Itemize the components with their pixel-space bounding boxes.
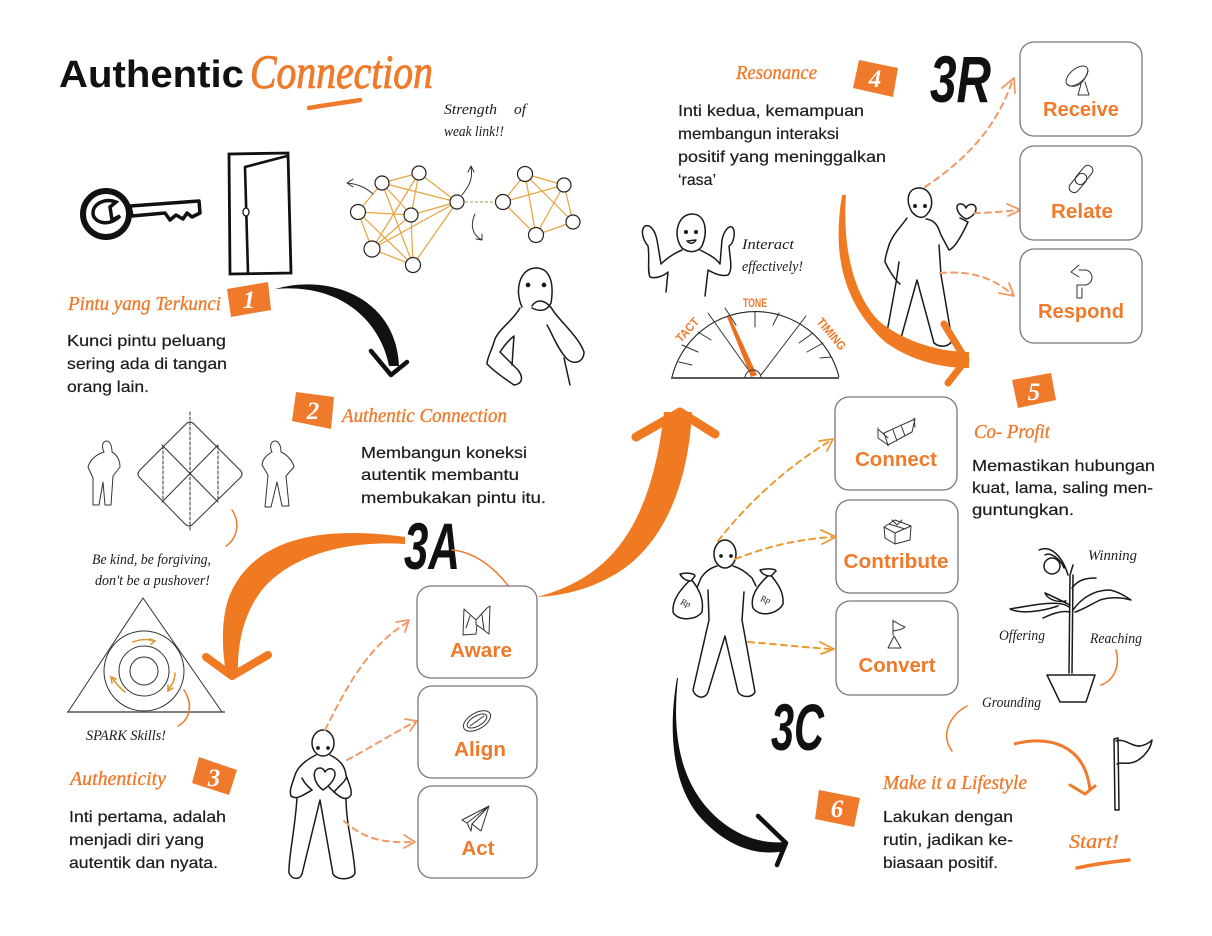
card: convert: Convert <box>858 655 936 677</box>
card: respond: Respond <box>1038 301 1124 323</box>
note: interact effectively: effectively! <box>742 259 803 275</box>
plant illustration <box>1010 549 1131 702</box>
panel: step 2: Authentic Connection <box>340 405 507 427</box>
dashed arrows: person to 3C <box>718 439 836 654</box>
card: aware: Aware <box>450 640 512 662</box>
figure: person with money bags: Rp <box>678 596 693 609</box>
card: contribute <box>836 500 958 593</box>
badge 1 <box>227 282 271 317</box>
panel: step 3 <box>68 757 237 872</box>
panel: step 6 <box>815 772 1027 872</box>
arrow: black step 1 to 2 <box>275 284 407 375</box>
note: strength of weak link: of <box>514 102 528 118</box>
gauge: tact tone timing: TONE <box>743 296 767 310</box>
card: contribute: Contribute <box>844 551 948 573</box>
card: connect: Connect <box>855 449 937 471</box>
panel: step 1: orang lain. <box>67 379 149 396</box>
figure: person offering heart <box>885 188 976 346</box>
arrow: small orange to start <box>1014 741 1095 794</box>
panel: step 3: Inti pertama, adalah <box>69 809 226 826</box>
panel: step 4: ‘rasa’ <box>678 172 716 189</box>
icon: return sign <box>1071 265 1092 298</box>
card: respond <box>1020 249 1142 343</box>
badge 1: 1 <box>243 287 255 314</box>
icon: flag on hill <box>888 620 905 648</box>
badge 5 <box>1012 373 1056 408</box>
note: interact effectively <box>741 237 803 275</box>
icon: bed <box>878 418 915 446</box>
note: interact effectively: Interact <box>741 237 795 253</box>
card: receive: Receive <box>1043 99 1119 121</box>
figure: person with money bags <box>673 540 783 697</box>
note: be kind <box>92 552 211 589</box>
arrow: black 3C to lifestyle <box>673 678 786 865</box>
badge 6: 6 <box>831 796 844 823</box>
icon: start flag <box>1114 738 1152 810</box>
badge 3: 3 <box>207 765 220 792</box>
icon: door <box>229 153 291 274</box>
title <box>59 46 433 108</box>
panel: step 1: Pintu yang Terkunci <box>67 293 221 315</box>
arrow: orange 3A to authenticity <box>206 533 405 676</box>
plant labels: Grounding <box>982 695 1041 711</box>
plant labels: Offering <box>999 628 1045 644</box>
badge 5: 5 <box>1028 379 1040 406</box>
network diagram <box>347 166 580 272</box>
panel: step 2: Membangun koneksi <box>361 445 527 462</box>
icon: gift <box>884 520 911 544</box>
arrow: orange to co-profit <box>839 195 969 383</box>
card: act <box>418 786 537 878</box>
icon: satellite dish <box>1063 62 1091 95</box>
panel: step 6: rutin, jadikan ke- <box>883 832 1013 849</box>
panel: step 5: Memastikan hubungan <box>972 458 1155 475</box>
diagram: diamond with two people <box>88 412 294 546</box>
card: relate <box>1020 146 1142 240</box>
card: align <box>418 686 537 778</box>
panel: step 5 <box>972 373 1155 519</box>
badge 6 <box>815 790 860 827</box>
icon: map <box>463 606 490 635</box>
panel: step 4: positif yang meninggalkan <box>678 149 886 166</box>
panel: step 6: biasaan positif. <box>883 855 998 872</box>
badge 3 <box>192 757 237 795</box>
gauge: tact tone timing <box>671 296 849 378</box>
big label: 3C: 3C <box>771 690 825 764</box>
panel: step 1: sering ada di tangan <box>67 356 227 373</box>
card: align: Align <box>454 739 506 761</box>
plant labels <box>947 548 1142 751</box>
badge 4 <box>853 60 898 97</box>
panel: step 4: membangun interaksi <box>678 126 839 143</box>
connector: 3A to aware <box>452 550 510 588</box>
dashed arrows: person to 3R <box>925 78 1021 296</box>
big label: 3A: 3A <box>404 509 460 583</box>
panel: step 5: kuat, lama, saling men- <box>972 480 1153 497</box>
gauge: tact tone timing: TACT <box>673 314 702 345</box>
panel: step 4 <box>678 60 898 189</box>
icon: key <box>83 191 200 237</box>
card: relate: Relate <box>1051 201 1113 223</box>
card: aware <box>417 586 537 678</box>
panel: step 3: Authenticity <box>68 768 166 790</box>
card: receive <box>1020 42 1142 136</box>
panel: step 1: Kunci pintu peluang <box>67 333 226 350</box>
title: Authentic <box>59 54 244 96</box>
big label: 3R: 3R <box>930 42 991 116</box>
panel: step 4: Resonance <box>735 62 817 84</box>
panel: step 6: Lakukan dengan <box>883 809 1013 826</box>
figure: thinking person <box>487 268 584 385</box>
panel: step 3: menjadi diri yang <box>69 832 204 849</box>
arrow: orange aware to resonance <box>537 412 715 597</box>
panel: step 4: Inti kedua, kemampuan <box>678 103 864 120</box>
panel: step 5: guntungkan. <box>972 502 1074 519</box>
panel: step 5: Co- Profit <box>974 421 1050 443</box>
dashed arrows: person to 3A <box>325 620 417 848</box>
badge 2 <box>292 392 334 429</box>
icon: paper plane <box>462 806 489 831</box>
card: convert <box>836 601 958 695</box>
start label <box>1069 831 1129 868</box>
card: act: Act <box>462 838 495 860</box>
figure: person hands up <box>642 214 734 296</box>
note: strength of weak link <box>444 102 528 140</box>
gauge: tact tone timing: TIMING <box>814 315 849 353</box>
note: spark skills: SPARK Skills! <box>86 728 166 744</box>
plant labels: Reaching <box>1089 631 1142 647</box>
icon: chain link <box>1067 163 1095 195</box>
panel: step 3: autentik dan nyata. <box>69 855 218 872</box>
panel: step 2: autentik membantu <box>361 467 519 484</box>
figure: person with money bags: Rp <box>759 593 772 606</box>
start label: Start! <box>1069 831 1119 853</box>
note: strength of weak link: Strength <box>444 102 497 118</box>
icon: compass <box>460 707 494 735</box>
note: be kind: Be kind, be forgiving, <box>92 552 211 568</box>
diagram: spark triangle <box>67 598 225 726</box>
badge 2: 2 <box>306 398 319 425</box>
card: connect <box>835 397 957 490</box>
figure: person with heart <box>289 730 355 879</box>
note: strength of weak link: weak link!! <box>444 124 504 140</box>
plant labels: Winning <box>1088 548 1137 564</box>
title: Connection <box>250 46 433 99</box>
panel: step 1 <box>67 282 271 396</box>
panel: step 2: membukakan pintu itu. <box>361 490 546 507</box>
note: be kind: don't be a pushover! <box>95 573 210 589</box>
panel: step 2 <box>292 392 546 507</box>
badge 4: 4 <box>868 66 881 93</box>
panel: step 6: Make it a Lifestyle <box>882 772 1027 794</box>
